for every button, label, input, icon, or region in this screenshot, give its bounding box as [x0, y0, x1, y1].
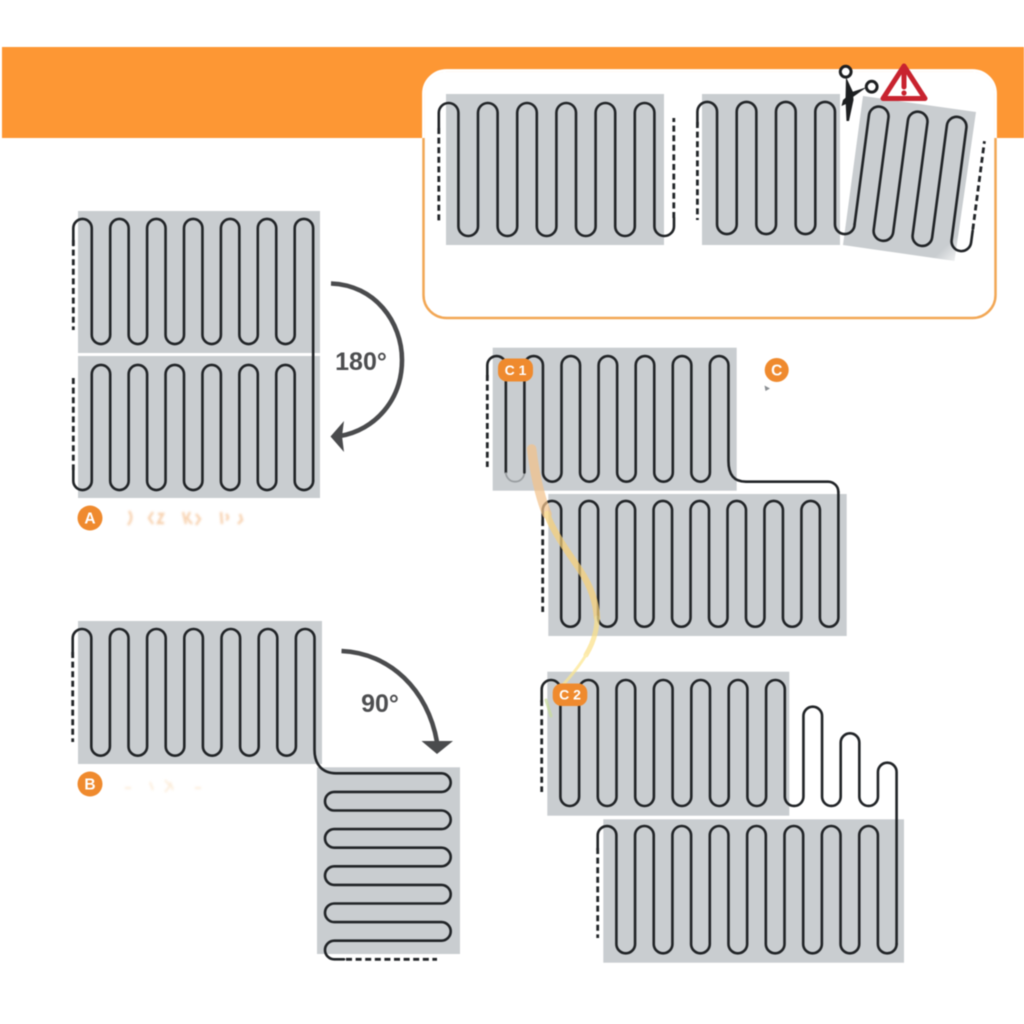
badge C2: C 2: [559, 686, 581, 702]
small grey marker: [764, 386, 770, 391]
arrow: 90 degree: [342, 651, 453, 754]
orange header band: [2, 47, 1024, 138]
badge A: [78, 506, 102, 530]
icon: scissors: [840, 66, 877, 121]
diagram C2: mats with wavy cable: [542, 672, 904, 963]
badge C: [765, 358, 789, 382]
faded caption B: [125, 780, 201, 792]
cut mat: [697, 94, 987, 261]
badge A: A: [84, 510, 96, 528]
yellow ribbon linking C1 and C2: [532, 449, 597, 716]
label: 180 degrees: 180°: [335, 348, 387, 376]
diagram C1: mats with connecting cable: [487, 348, 847, 636]
arrow: 180 degree: [330, 284, 402, 452]
badge C: C: [771, 362, 782, 380]
badge B: B: [84, 776, 96, 794]
faded caption A: [128, 511, 242, 525]
diagram B: 90 degree turn: [73, 621, 460, 959]
correct mat: [439, 94, 674, 245]
badge B: [78, 772, 102, 796]
badge C2: [553, 684, 587, 706]
badge C1: [498, 358, 533, 382]
label: 90 degrees: 90°: [361, 690, 399, 718]
panel: cutting warning: [424, 66, 996, 318]
badge C1: C 1: [505, 362, 527, 378]
icon: warning triangle: [883, 66, 925, 98]
diagram A: 180 degree turn: [73, 211, 320, 498]
